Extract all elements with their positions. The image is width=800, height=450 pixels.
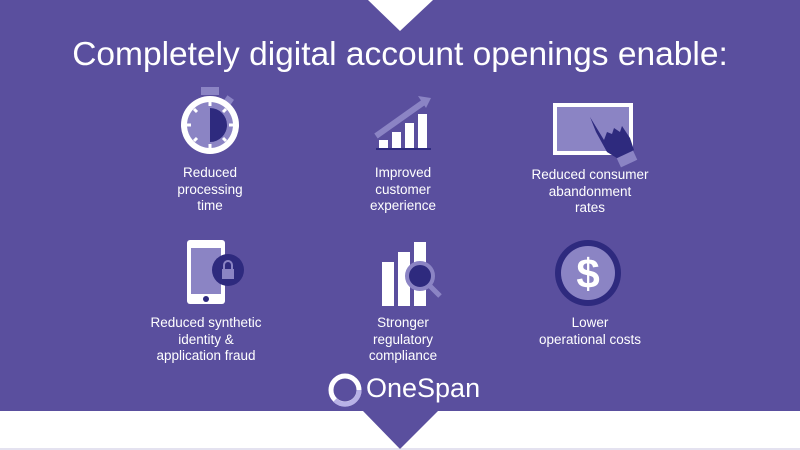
text: costs: operational costs bbox=[539, 332, 641, 346]
icon: growth chart bbox=[374, 96, 431, 150]
text: abandonment: rates bbox=[575, 200, 605, 215]
text: customer experience: Improved bbox=[375, 165, 431, 180]
text: costs bbox=[539, 315, 641, 347]
icon: dollar coin bbox=[555, 240, 621, 306]
text: processing time: processing bbox=[177, 182, 243, 196]
text: fraud: identity & bbox=[178, 332, 234, 346]
text: fraud: Reduced synthetic bbox=[150, 315, 262, 330]
text: costs: Lower bbox=[572, 315, 608, 330]
text: customer experience: experience bbox=[370, 198, 436, 213]
text: fraud: application fraud bbox=[156, 348, 256, 363]
logo: OneSpan bbox=[366, 373, 480, 403]
text: abandonment: Reduced consumer bbox=[531, 167, 649, 182]
text: fraud bbox=[150, 315, 262, 363]
text: processing time: Reduced bbox=[183, 165, 237, 180]
text: processing time: time bbox=[197, 198, 223, 213]
text: customer experience bbox=[370, 165, 436, 213]
text: abandonment: abandonment bbox=[549, 184, 631, 198]
title: Completely digital account openings enable: bbox=[72, 36, 728, 73]
logo bbox=[328, 373, 480, 407]
icon: tablet with hand bbox=[553, 103, 638, 168]
icon: phone with lock bbox=[187, 240, 244, 304]
text: compliance: Stronger bbox=[377, 315, 429, 330]
icon: dollar coin: $ bbox=[576, 250, 600, 297]
text: processing time bbox=[177, 165, 243, 213]
text: abandonment bbox=[531, 167, 649, 215]
text: compliance: compliance bbox=[369, 348, 437, 363]
text: compliance bbox=[369, 315, 437, 363]
text: compliance: regulatory bbox=[373, 332, 433, 346]
text: customer experience: customer bbox=[375, 182, 431, 196]
icon: bars with magnifier bbox=[382, 242, 442, 306]
icon: stopwatch bbox=[181, 87, 239, 154]
